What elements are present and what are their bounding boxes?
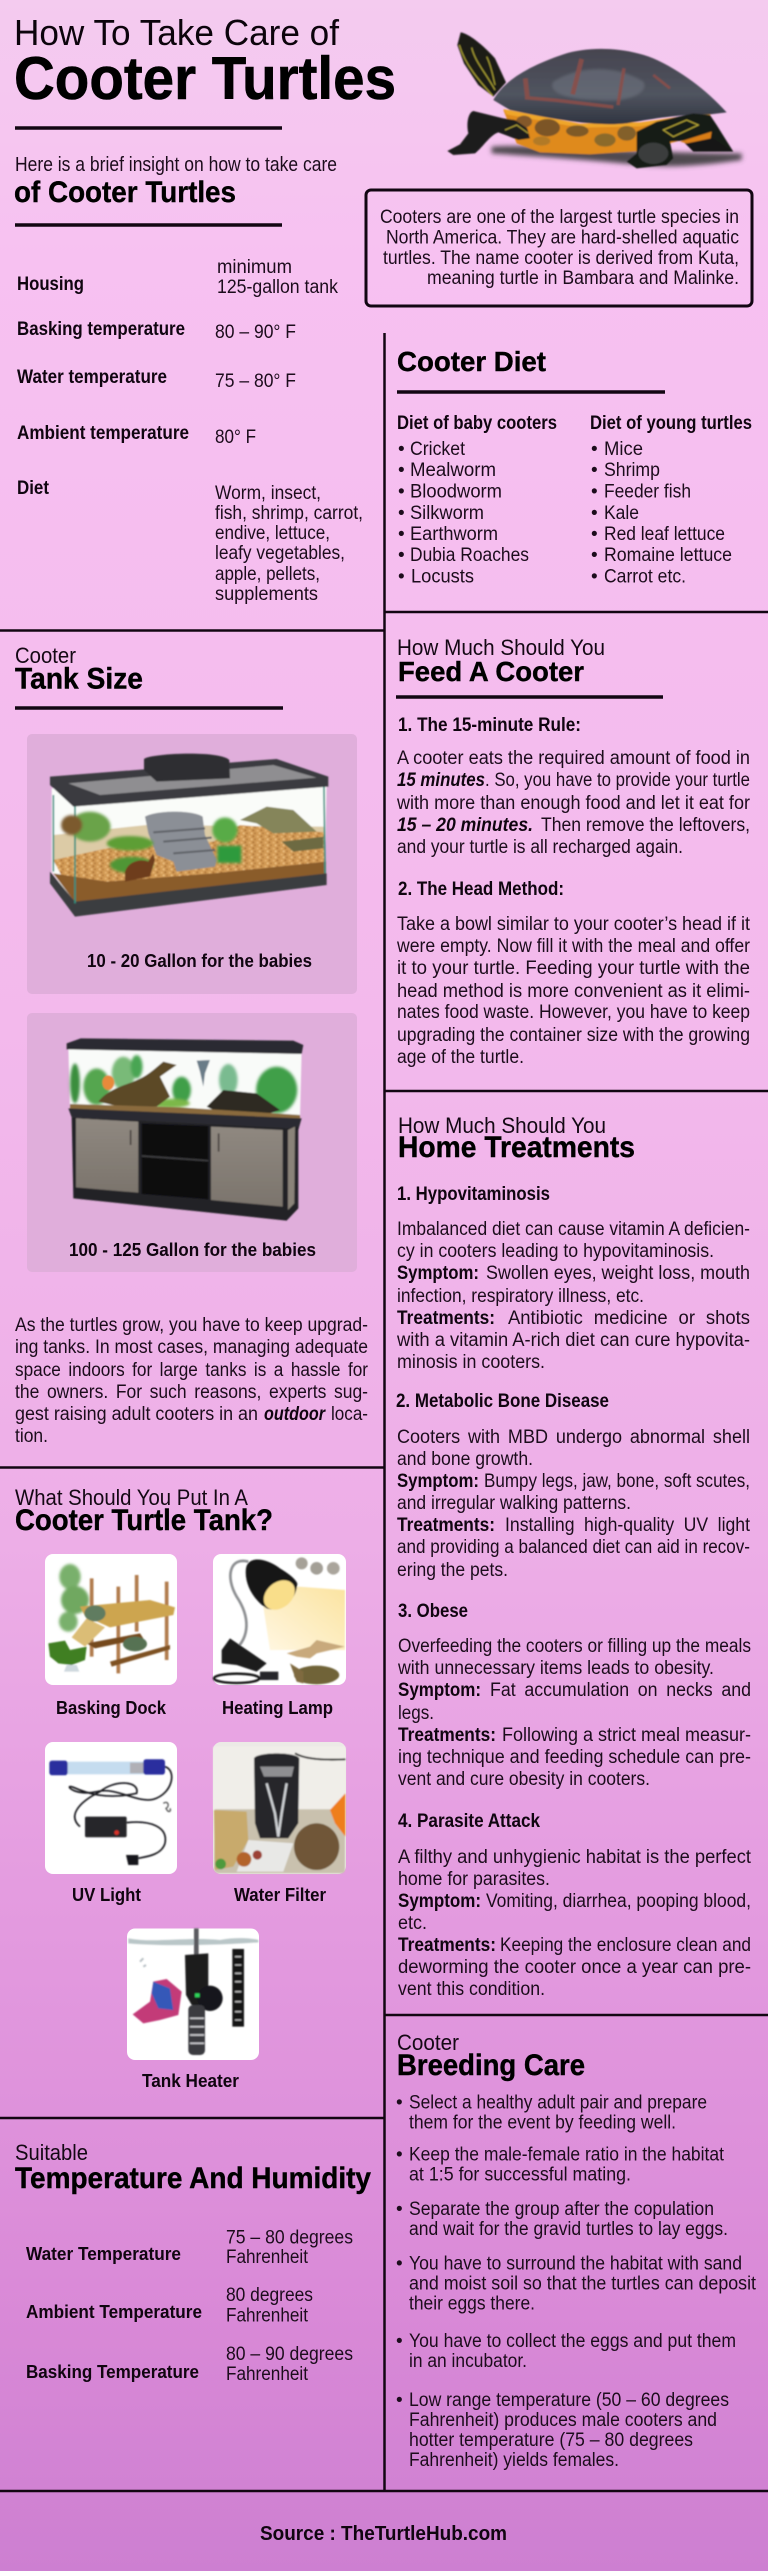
- label: heating lamp: Heating Lamp: [222, 1698, 333, 1718]
- text: tank advice: loca-: [331, 1404, 368, 1425]
- text: hypovitaminosis: [396, 1184, 750, 1373]
- ambient temperature row: Ambient Temperature: [26, 2302, 202, 2322]
- subtitle: Here is a brief insight on how to take care: [15, 154, 337, 176]
- ambient temperature row: Ambient temperature: [17, 423, 189, 444]
- callout: about cooters: meaning turtle in Bambara and Malinke.: [427, 268, 739, 289]
- label: tank heater: Tank Heater: [142, 2071, 239, 2091]
- label: basking dock: Basking Dock: [56, 1698, 167, 1718]
- ambient temperature row: Fahrenheit: [226, 2306, 309, 2326]
- list: breeding steps: •: [396, 2144, 403, 2166]
- housing row: minimum: [217, 257, 292, 278]
- housing row: [17, 257, 338, 298]
- list: baby cooter diet: •: [398, 482, 405, 502]
- basking temperature row: [17, 319, 296, 343]
- panel: home treatments: [396, 1113, 752, 2000]
- heading: temperature and humidity: Suitable: [15, 2140, 88, 2165]
- text: head method: [396, 879, 751, 1068]
- text: parasite attack: [398, 1811, 752, 2000]
- list: breeding steps: Fahrenheit) yields females.: [409, 2450, 619, 2471]
- text: obese: with unnecessary items leads to obesity.: [397, 1658, 714, 1679]
- text: 15-minute rule: Then remove the leftovers,: [541, 815, 750, 836]
- water temperature row: Water temperature: [17, 367, 167, 388]
- list: breeding steps: Separate the group after the copulation: [409, 2199, 714, 2220]
- list: baby cooter diet: •: [398, 439, 405, 460]
- list: baby cooter diet: Bloodworm: [410, 482, 502, 502]
- text: hypovitaminosis: minosis in cooters.: [397, 1352, 545, 1373]
- heading: tank equipment: Cooter Turtle Tank?: [15, 1504, 273, 1537]
- heading: breeding care: Cooter: [397, 2030, 459, 2055]
- list: baby cooter diet: Earthworm: [410, 524, 498, 545]
- text: head method: head method is more convenient as it elimi-: [397, 981, 750, 1002]
- list: breeding steps: their eggs there.: [409, 2294, 535, 2314]
- water temperature row: [17, 367, 296, 392]
- text: parasite attack: Symptom:: [398, 1891, 481, 1912]
- heading: temperature and humidity: [15, 2140, 371, 2195]
- list: young turtle diet: •: [591, 460, 598, 481]
- text: 15-minute rule: A cooter eats the required amount of food in: [397, 748, 750, 769]
- text: metabolic bone disease: 2. Metabolic Bone Disease: [396, 1391, 609, 1412]
- list: breeding steps: •: [396, 2331, 403, 2352]
- diet row: [17, 478, 363, 605]
- icon: small turtle tank: [50, 754, 328, 917]
- text: metabolic bone disease: and bone growth.: [397, 1449, 533, 1470]
- heading: tank size: [15, 643, 143, 696]
- text: hypovitaminosis: Treatments:: [397, 1308, 495, 1329]
- water temperature row: Fahrenheit: [226, 2247, 309, 2268]
- text: head method: Take a bowl similar to your cooter’s head if it: [397, 914, 751, 935]
- callout: about cooters: turtles. The name cooter is derived from Kuta,: [383, 248, 739, 269]
- text: parasite attack: deworming the cooter once a year can pre-: [398, 1957, 751, 1978]
- text: metabolic bone disease: Treatments:: [397, 1515, 495, 1536]
- text: metabolic bone disease: Cooters with MBD undergo abnormal shell: [397, 1427, 750, 1448]
- icon: water filter: [213, 1747, 345, 1873]
- basking temperature row: Basking temperature: [17, 319, 185, 340]
- list: breeding steps: •: [396, 2390, 403, 2411]
- tile: tank heater: [127, 1928, 259, 2091]
- ambient temperature row: [26, 2285, 313, 2326]
- water temperature row: 75 – 80° F: [215, 371, 296, 392]
- heading: feed a cooter: Feed A Cooter: [398, 656, 584, 687]
- list: breeding steps: You have to collect the eggs and put them: [409, 2331, 736, 2352]
- panel: tank size: [15, 643, 369, 1447]
- caption: large tank: 100 - 125 Gallon for the babies: [69, 1240, 316, 1260]
- list: young turtle diet: •: [591, 524, 598, 545]
- card: large tank: [27, 1013, 357, 1272]
- text: parasite attack: A filthy and unhygienic habitat is the perfect: [398, 1847, 752, 1868]
- icon: cooter turtle photo: [447, 32, 742, 168]
- text: metabolic bone disease: Symptom:: [397, 1471, 479, 1492]
- list: young turtle diet: Red leaf lettuce: [604, 524, 725, 545]
- list: young turtle diet: Carrot etc.: [604, 566, 686, 588]
- list: breeding steps: •: [396, 2199, 403, 2220]
- text: obese: Symptom:: [398, 1680, 481, 1701]
- panel: breeding care: [396, 2030, 757, 2471]
- list: young turtle diet: •: [591, 439, 598, 460]
- subtitle: of Cooter Turtles: [14, 176, 236, 209]
- basking temperature row: Basking Temperature: [26, 2362, 199, 2382]
- ambient temperature row: 80 degrees: [226, 2285, 313, 2306]
- housing row: Housing: [17, 274, 84, 295]
- heading: breeding care: Breeding Care: [397, 2049, 585, 2082]
- text: parasite attack: Vomiting, diarrhea, pooping blood,: [486, 1891, 751, 1912]
- list: breeding steps: them for the event by feeding well.: [409, 2112, 676, 2134]
- diet row: leafy vegetables,: [215, 543, 345, 564]
- list: baby cooter diet: Silkworm: [410, 503, 484, 524]
- list: breeding steps: in an incubator.: [409, 2351, 527, 2372]
- title: Cooter Turtles: [14, 45, 396, 112]
- heading: feed a cooter: [397, 635, 605, 687]
- text: head method: upgrading the container size with the growing: [397, 1025, 750, 1046]
- label: water filter: Water Filter: [234, 1885, 326, 1905]
- list: young turtle diet: •: [591, 503, 598, 524]
- list: breeding steps: Low range temperature (50 – 60 degrees: [409, 2390, 729, 2411]
- label: uv light: UV Light: [72, 1885, 141, 1905]
- text: parasite attack: 4. Parasite Attack: [398, 1811, 540, 1832]
- text: 15-minute rule: 1. The 15-minute Rule:: [398, 715, 581, 736]
- list: young turtle diet: Feeder fish: [604, 482, 691, 502]
- list: breeding steps: •: [396, 2254, 403, 2274]
- heading: tank size: Cooter: [15, 643, 76, 668]
- text: metabolic bone disease: and irregular walking patterns.: [397, 1493, 631, 1514]
- diet row: endive, lettuce,: [215, 523, 330, 544]
- text: 15-minute rule: [396, 715, 751, 858]
- icon: large tank on stand: [67, 1038, 303, 1221]
- text: obese: 3. Obese: [398, 1601, 468, 1622]
- panel: feeding: [396, 635, 751, 1068]
- panel: tank equipment: [15, 1485, 346, 2091]
- text: obese: ing technique and feeding schedule can pre-: [398, 1747, 751, 1768]
- list: breeding steps: Keep the male-female ratio in the habitat: [409, 2144, 725, 2166]
- text: tank advice: [15, 1315, 369, 1447]
- diet row: Diet: [17, 478, 50, 499]
- heading: tank equipment: [15, 1485, 273, 1537]
- text: tank advice: gest raising adult cooters in an: [15, 1404, 258, 1425]
- title: [14, 12, 396, 112]
- list: breeding steps: and wait for the gravid turtles to lay eggs.: [409, 2219, 728, 2240]
- facts table: [17, 257, 363, 605]
- text: obese: vent and cure obesity in cooters.: [398, 1769, 650, 1790]
- heading: breeding care: [397, 2030, 585, 2082]
- basking temperature row: Fahrenheit: [226, 2364, 309, 2385]
- list: young turtle diet: Romaine lettuce: [604, 545, 732, 566]
- diet row: Worm, insect,: [215, 483, 321, 504]
- text: 15-minute rule: 15 minutes: [397, 770, 485, 791]
- list: baby cooter diet: Dubia Roaches: [410, 545, 529, 566]
- icon: basking dock: [48, 1564, 175, 1673]
- list: young turtle diet: •: [591, 566, 598, 588]
- text: 15-minute rule: 15 – 20 minutes.: [397, 815, 533, 836]
- heading: cooter diet: Cooter Diet: [397, 346, 546, 377]
- panel: cooter diet: [397, 346, 752, 588]
- housing row: 125-gallon tank: [217, 277, 338, 298]
- text: hypovitaminosis: with a vitamin A-rich diet can cure hypovita-: [396, 1330, 750, 1351]
- heading: tank equipment: What Should You Put In A: [15, 1485, 248, 1510]
- list: breeding steps: [396, 2092, 757, 2471]
- water temperature row: [26, 2228, 353, 2268]
- tile: heating lamp: [213, 1554, 346, 1718]
- text: head method: age of the turtle.: [397, 1047, 524, 1068]
- list: young turtle diet: [590, 413, 752, 588]
- card: small tank: [27, 734, 357, 994]
- subtitle: [14, 154, 337, 209]
- list: baby cooter diet: •: [398, 524, 405, 545]
- ambient temperature row: [17, 423, 256, 448]
- list: breeding steps: •: [396, 2092, 403, 2114]
- text: 15-minute rule: with more than enough food and let it eat for: [396, 793, 751, 814]
- tile: uv light: [45, 1742, 177, 1905]
- basking temperature row: 80 – 90° F: [215, 322, 296, 343]
- text: 15-minute rule: and your turtle is all recharged again.: [397, 837, 683, 858]
- callout: about cooters: Cooters are one of the largest turtle species in: [380, 207, 739, 228]
- text: obese: Treatments:: [398, 1725, 496, 1746]
- list: breeding steps: Select a healthy adult pair and prepare: [409, 2092, 707, 2114]
- text: tank advice: space indoors for large tanks is a hassle for: [15, 1360, 369, 1381]
- text: hypovitaminosis: 1. Hypovitaminosis: [397, 1184, 550, 1205]
- list: young turtle diet: •: [591, 545, 598, 566]
- list: young turtle diet: •: [591, 482, 598, 502]
- list: young turtle diet: Mice: [604, 439, 643, 460]
- text: tank advice: the owners. For such reasons, experts sug-: [15, 1382, 368, 1403]
- list: baby cooter diet: •: [398, 566, 405, 588]
- list: breeding steps: and moist soil so that the turtles can deposit: [409, 2274, 757, 2294]
- caption: small tank: 10 - 20 Gallon for the babies: [87, 951, 312, 971]
- list: baby cooter diet: Diet of baby cooters: [397, 413, 557, 434]
- text: head method: it to your turtle. Feeding your turtle with the: [397, 958, 750, 979]
- tile: water filter: [213, 1742, 346, 1905]
- text: tank advice: ing tanks. In most cases, managing adequate: [15, 1337, 368, 1358]
- text: metabolic bone disease: [396, 1391, 751, 1581]
- text: metabolic bone disease: ering the pets.: [397, 1560, 508, 1581]
- text: hypovitaminosis: Antibiotic medicine or shots: [508, 1308, 750, 1329]
- text: hypovitaminosis: Swollen eyes, weight loss, mouth: [486, 1263, 750, 1284]
- list: young turtle diet: Shrimp: [604, 460, 660, 481]
- list: breeding steps: Fahrenheit) produces male cooters and: [409, 2410, 717, 2431]
- text: hypovitaminosis: Symptom:: [397, 1263, 479, 1284]
- heading: home treatments: Home Treatments: [398, 1131, 635, 1164]
- text: hypovitaminosis: infection, respiratory illness, etc.: [397, 1286, 644, 1307]
- text: parasite attack: home for parasites.: [398, 1869, 550, 1890]
- basking temperature row: [26, 2344, 353, 2385]
- title: How To Take Care of: [14, 12, 340, 53]
- list: baby cooter diet: •: [398, 545, 405, 566]
- callout: about cooters: North America. They are hard-shelled aquatic: [386, 228, 739, 248]
- ambient temperature row: 80° F: [215, 427, 256, 448]
- text: parasite attack: Treatments:: [398, 1935, 496, 1956]
- text: obese: Fat accumulation on necks and: [490, 1680, 751, 1701]
- water temperature row: Water Temperature: [26, 2244, 181, 2264]
- icon: uv light: [49, 1759, 172, 1865]
- list: young turtle diet: Kale: [604, 503, 639, 524]
- diet row: apple, pellets,: [215, 564, 320, 585]
- text: tank advice: outdoor: [264, 1404, 326, 1425]
- text: parasite attack: vent this condition.: [398, 1979, 545, 2000]
- list: baby cooter diet: Cricket: [410, 439, 466, 460]
- source footer: Source : TheTurtleHub.com: [260, 2523, 507, 2545]
- icon: tank heater: [128, 1928, 258, 2055]
- text: obese: legs.: [398, 1703, 434, 1724]
- list: baby cooter diet: [397, 413, 557, 588]
- diet row: fish, shrimp, carrot,: [215, 503, 363, 524]
- tile: basking dock: [45, 1554, 177, 1718]
- text: head method: were empty. Now fill it with the meal and offer: [396, 936, 751, 957]
- list: breeding steps: at 1:5 for successful mating.: [409, 2164, 631, 2186]
- text: head method: 2. The Head Method:: [398, 879, 564, 900]
- list: breeding steps: You have to surround the habitat with sand: [409, 2254, 742, 2274]
- heading: home treatments: [398, 1113, 635, 1164]
- text: hypovitaminosis: cy in cooters leading to hypovitaminosis.: [397, 1241, 714, 1262]
- text: obese: Following a strict meal measur-: [502, 1725, 751, 1746]
- heading: temperature and humidity: Temperature And Humidity: [15, 2162, 371, 2195]
- heading: tank size: Tank Size: [15, 662, 143, 696]
- text: parasite attack: etc.: [398, 1913, 427, 1934]
- callout: about cooters: [366, 190, 752, 306]
- panel: temperature and humidity: [15, 2140, 371, 2385]
- basking temperature row: 80 – 90 degrees: [226, 2344, 353, 2365]
- list: baby cooter diet: Mealworm: [410, 460, 496, 481]
- text: metabolic bone disease: Installing high-quality UV light: [505, 1515, 751, 1536]
- list: baby cooter diet: •: [398, 503, 405, 524]
- text: tank advice: As the turtles grow, you have to keep upgrad-: [15, 1315, 368, 1336]
- list: baby cooter diet: •: [398, 460, 405, 481]
- text: tank advice: tion.: [15, 1426, 48, 1447]
- icon: heating lamp: [214, 1557, 345, 1684]
- list: baby cooter diet: Locusts: [411, 566, 474, 588]
- heading: feed a cooter: How Much Should You: [397, 635, 605, 660]
- diet row: supplements: [215, 584, 318, 605]
- heading: home treatments: How Much Should You: [398, 1113, 606, 1138]
- list: breeding steps: hotter temperature (75 – 80 degrees: [409, 2430, 693, 2451]
- water temperature row: 75 – 80 degrees: [226, 2228, 353, 2248]
- text: obese: [397, 1601, 751, 1790]
